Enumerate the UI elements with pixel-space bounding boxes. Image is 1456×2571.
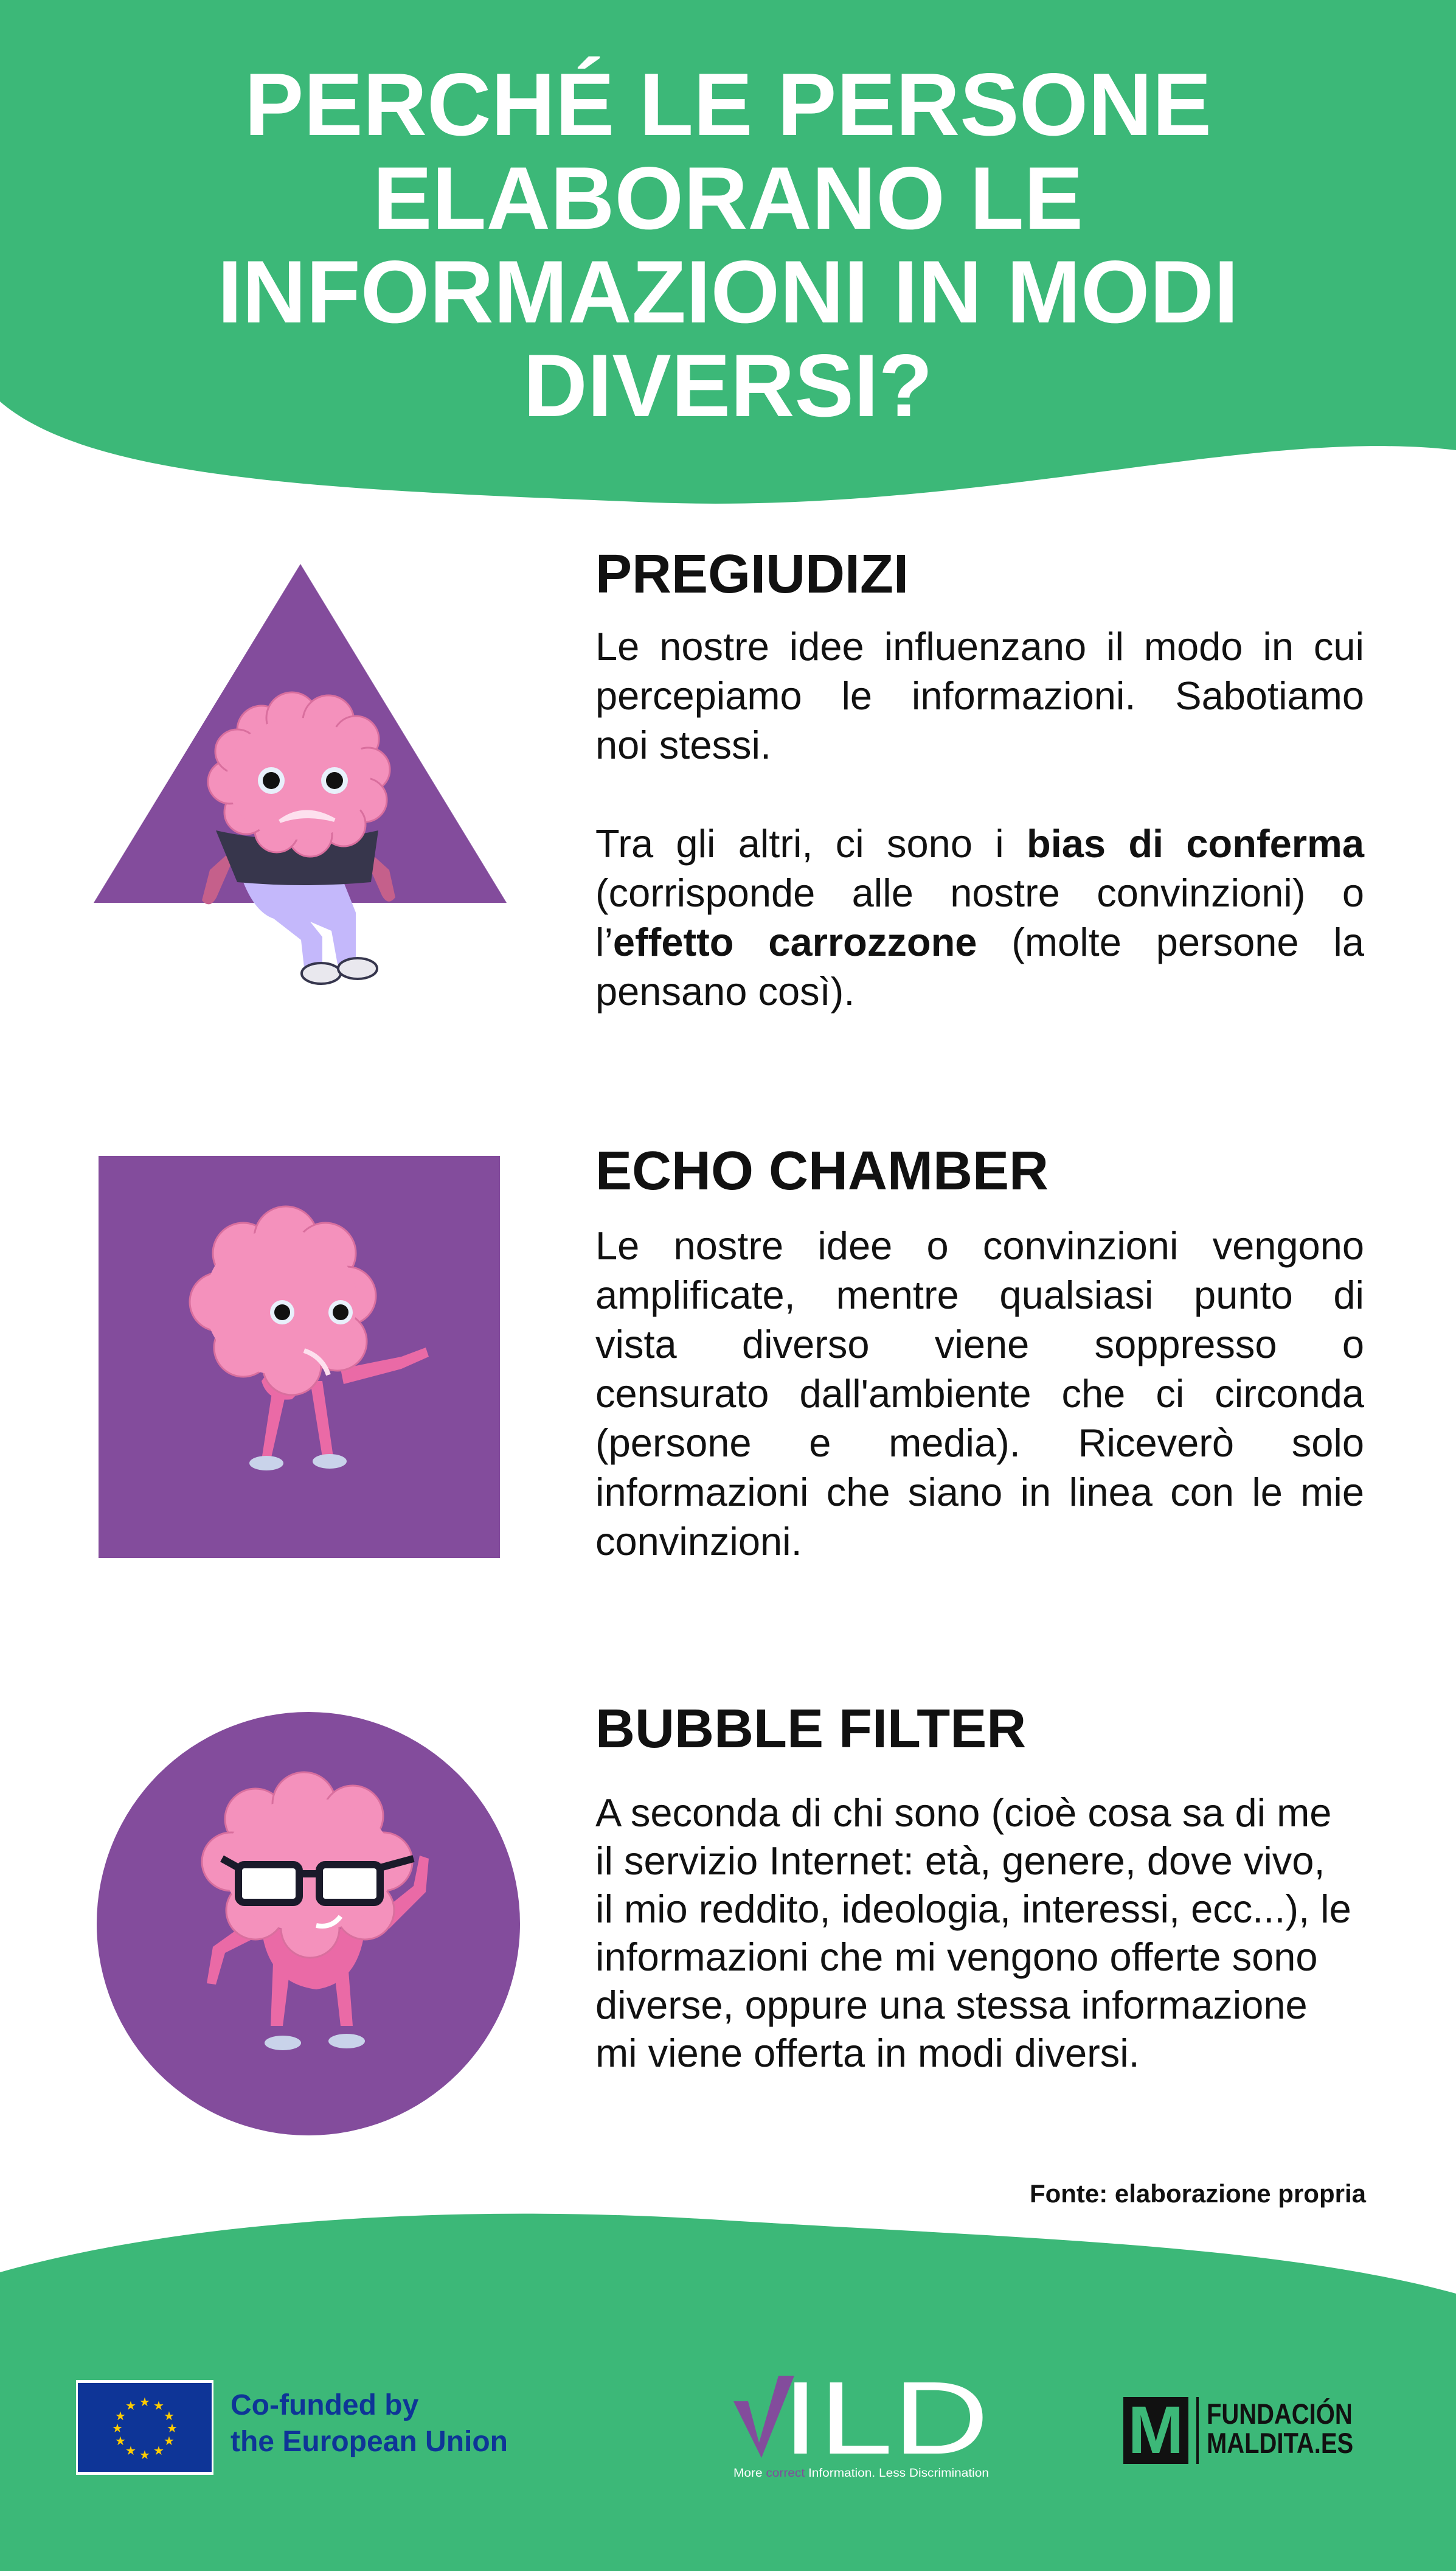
heading: bubble filter: BUBBLE FILTER [595, 1699, 1026, 1759]
heading: pregiudizi: PREGIUDIZI [595, 544, 909, 605]
source note: Fonte: elaborazione propria [1030, 2179, 1366, 2208]
text block: pregiudizi: percepiamo le informazioni. Sabotiamo [595, 673, 1364, 718]
footer green wave [0, 2214, 1456, 2571]
text block: echo chamber: informazioni che siano in linea con le mie [595, 1470, 1364, 1514]
panel: pregiudizi [595, 544, 1365, 1014]
panel: bubble filter [595, 1699, 1351, 2075]
text block: echo chamber: (persone e media). Riceverò solo [595, 1421, 1364, 1465]
title: INFORMAZIONI IN MODI [218, 242, 1238, 341]
logo: Fundación Maldita: M [1128, 2393, 1184, 2468]
icon: EU flag [76, 2380, 213, 2475]
logo: Fundación Maldita: MALDITA.ES [1207, 2427, 1353, 2459]
panel: echo chamber [595, 1141, 1365, 1564]
text: co-funded [231, 2389, 508, 2458]
text block: echo chamber: censurato dall'ambiente che ci circonda [595, 1371, 1364, 1416]
text block: pregiudizi: l’effetto carrozzone (molte persone la [595, 920, 1364, 964]
text block: echo chamber: Le nostre idee o convinzioni vengono [595, 1223, 1364, 1268]
icon: EU flag: ★ [125, 2399, 136, 2413]
text block: bubble filter: mi viene offerta in modi diversi. [595, 2031, 1140, 2075]
icon: EU flag: ★ [153, 2399, 164, 2413]
logo: MILD: More correct Information. Less Discrimination [733, 2467, 989, 2480]
title: DIVERSI? [523, 336, 933, 435]
logo: EU co-funded [76, 2380, 508, 2475]
title [218, 55, 1238, 435]
text block: pregiudizi: (corrisponde alle nostre convinzioni) o [595, 871, 1364, 915]
text block: pregiudizi: Le nostre idee influenzano il modo in cui [595, 624, 1364, 669]
title: ELABORANO LE [373, 148, 1083, 248]
logo: Fundación Maldita: FUNDACIÓN [1207, 2398, 1353, 2430]
text block: bubble filter: il mio reddito, ideologia, interessi, ecc...), le [595, 1887, 1351, 1931]
text block: bubble filter: informazioni che mi vengono offerte sono [595, 1935, 1318, 1979]
text block: pregiudizi: noi stessi. [595, 723, 771, 767]
icon: EU flag: ★ [115, 2435, 126, 2448]
text block: bubble filter [595, 1790, 1351, 2075]
icon: EU flag: ★ [153, 2444, 164, 2458]
icon: EU flag: ★ [139, 2396, 150, 2409]
text block: echo chamber: amplificate, mentre qualsiasi punto di [595, 1273, 1364, 1317]
icon: circle with glasses brain [97, 1712, 520, 2135]
icon: triangle with sad brain [94, 564, 507, 984]
text block: echo chamber: convinzioni. [595, 1519, 802, 1564]
header green wave [0, 0, 1456, 504]
heading: echo chamber: ECHO CHAMBER [595, 1141, 1049, 1202]
text: co-funded: the European Union [231, 2426, 508, 2458]
text block: bubble filter: il servizio Internet: età, genere, dove vivo, [595, 1839, 1325, 1883]
title: PERCHÉ LE PERSONE [244, 55, 1212, 154]
icon: EU flag: ★ [115, 2410, 126, 2423]
icon: EU flag: ★ [164, 2410, 175, 2423]
text block: echo chamber: vista diverso viene soppresso o [595, 1322, 1364, 1366]
text: co-funded: Co-funded by [231, 2389, 418, 2421]
icon: EU flag: ★ [139, 2449, 150, 2462]
logo: MILD [733, 2376, 989, 2480]
text block: pregiudizi: pensano così). [595, 969, 855, 1014]
text block: bubble filter: A seconda di chi sono (cioè cosa sa di me [595, 1790, 1331, 1835]
text block: pregiudizi [595, 624, 1365, 1014]
text block: pregiudizi: Tra gli altri, ci sono i bias di conferma [595, 821, 1364, 866]
icon: EU flag: ★ [164, 2435, 175, 2448]
text block: bubble filter: diverse, oppure una stessa informazione [595, 1983, 1308, 2027]
icon: EU flag: ★ [125, 2444, 136, 2458]
icon: EU flag: ★ [167, 2422, 178, 2435]
icon: square with echo brain [99, 1156, 500, 1558]
icon: EU flag: ★ [112, 2422, 123, 2435]
logo: Fundación Maldita [1123, 2393, 1353, 2468]
text block: echo chamber [595, 1223, 1365, 1564]
